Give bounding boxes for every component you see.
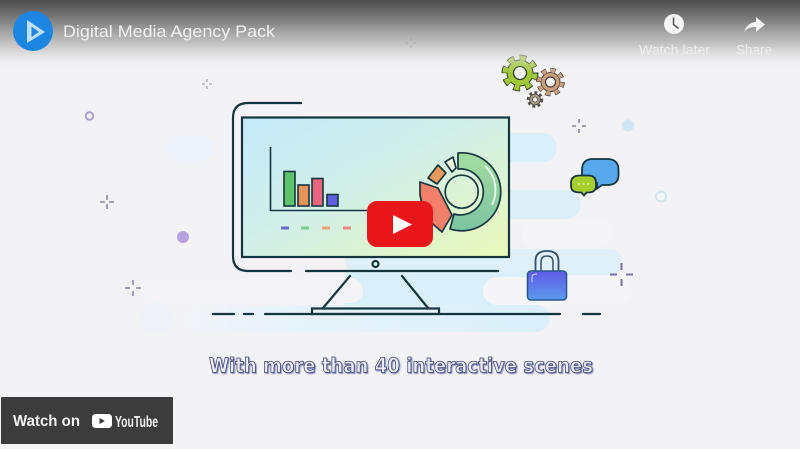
icon: green gear — [505, 58, 535, 88]
icon: gears — [505, 58, 562, 106]
caption: With more than 40 interactive scenes — [209, 354, 593, 378]
watch on youtube badge: YouTube — [115, 414, 158, 431]
icon: orange gear — [539, 70, 562, 94]
video title: Digital Media Agency Pack — [63, 22, 276, 41]
icon: clock — [664, 14, 684, 34]
share button — [736, 17, 772, 58]
watch on youtube badge: Watch on — [13, 413, 80, 430]
share button: Share — [736, 42, 772, 58]
icon: padlock — [528, 251, 566, 300]
play button — [367, 201, 433, 247]
bar chart — [270, 147, 368, 230]
watch later button — [639, 14, 711, 58]
top gradient overlay — [0, 0, 800, 72]
channel icon — [13, 11, 53, 51]
watch on youtube badge — [1, 397, 173, 444]
monitor screen — [242, 118, 509, 257]
icon: youtube logo — [92, 414, 112, 428]
monitor — [213, 103, 600, 314]
background blobs — [140, 133, 633, 334]
icon: share arrow — [744, 17, 765, 32]
watch later button: Watch later — [639, 42, 711, 58]
icon: chat bubbles — [571, 159, 618, 196]
donut chart — [420, 153, 501, 232]
icon: small gear — [528, 93, 542, 106]
decorative sparkles and dots — [86, 38, 666, 296]
